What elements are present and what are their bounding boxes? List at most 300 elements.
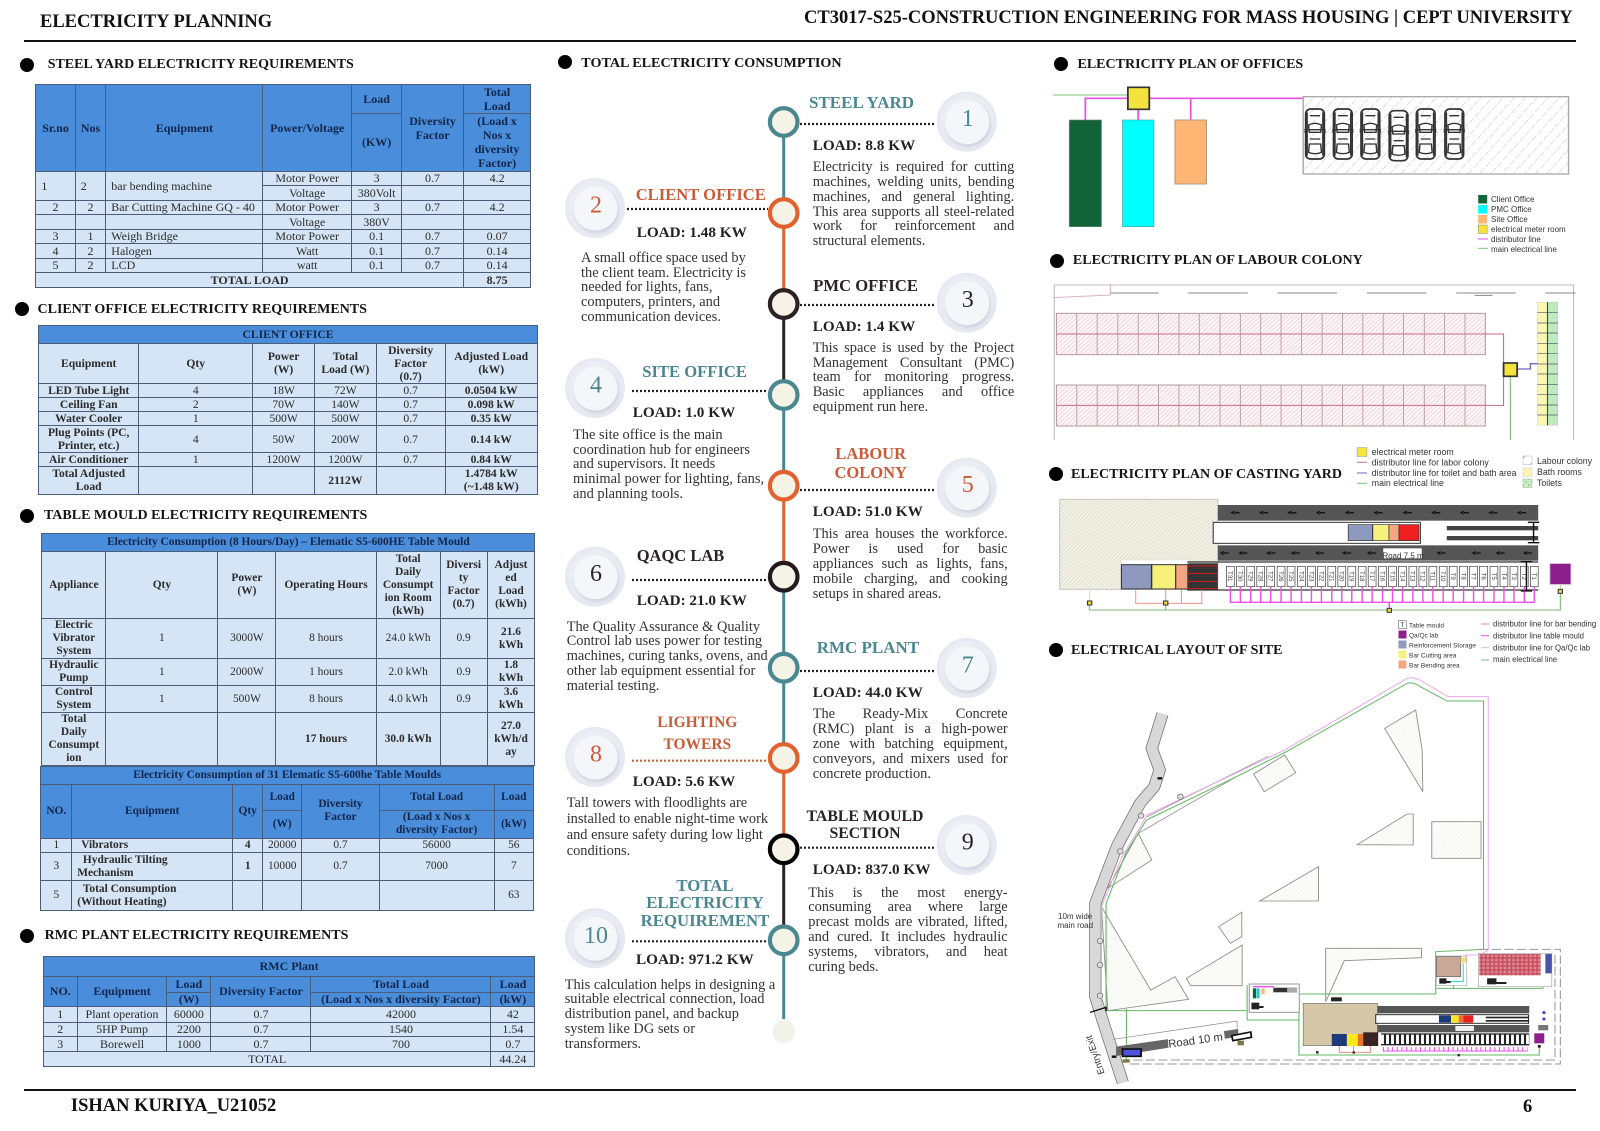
item 4 text: minimal power for lighting, fans, (573, 471, 764, 487)
item 8 text: conditions. (567, 843, 630, 859)
table: table mould 31 units: Total Consumption (83, 883, 176, 895)
item 10 text: transformers. (565, 1036, 641, 1052)
table: steel yard: Equipment (156, 121, 213, 135)
table: client office: 0.7 (403, 398, 418, 411)
table: steel yard: 1 (87, 229, 93, 243)
table: steel yard: 3 (374, 200, 380, 214)
table: rmc plant: 3 (57, 1037, 63, 1051)
dotted connectors (627, 124, 936, 941)
casting yard legend: Table mould (1409, 622, 1444, 630)
table: steel yard: Total (484, 85, 510, 99)
item 8 load: LOAD: 5.6 KW (633, 773, 735, 790)
plan of labour colony (1052, 283, 1593, 488)
table: client office: 1200W (267, 453, 301, 466)
table: table mould single: Pump (59, 672, 88, 684)
item 1 text: This area supports all steel-related (813, 204, 1014, 220)
table: table mould 31 units: 7 (511, 860, 517, 872)
table: table mould single: 0.9 (456, 666, 471, 678)
item 6 text: other lab equipment essential for (567, 663, 755, 679)
table: steel yard: 0.1 (369, 258, 384, 272)
table: steel yard: Motor Power (275, 200, 339, 214)
table: steel yard (35, 84, 531, 288)
item 2 title: CLIENT OFFICE (636, 185, 766, 204)
table: rmc plant: 1 (57, 1007, 63, 1021)
heading: total consumption: TOTAL ELECTRICITY CONSUMPTION (581, 54, 842, 70)
table: table mould single: ay (505, 746, 517, 758)
table: table mould single: 24.0 kWh (386, 632, 431, 644)
casting yard drawing: T26 (1277, 571, 1284, 582)
table: table mould single: System (56, 645, 91, 657)
table: rmc plant: TOTAL (248, 1052, 286, 1066)
table: steel yard: Halogen (111, 244, 152, 258)
table: client office: 18W (272, 384, 295, 397)
item 10 title: ELECTRICITY (646, 893, 764, 912)
number discs: 2 (590, 192, 602, 218)
item 8 title (657, 714, 737, 753)
table: table mould single: 21.6 (501, 626, 521, 638)
boundary (1127, 949, 1560, 1064)
table: table mould 31 units: 5 (53, 889, 59, 901)
heading: plan of labour colony: ELECTRICITY PLAN OF LABOUR COLONY (1073, 253, 1363, 268)
office legend: Site Office (1491, 215, 1528, 224)
table: table mould single: Adjust (495, 559, 527, 571)
table: table mould 31 units: 4 (245, 839, 251, 851)
table: steel yard: Motor Power (275, 229, 339, 243)
table: table mould 31 units: (Without Heating) (77, 896, 167, 908)
table: steel yard: 0.07 (487, 229, 508, 243)
item 5 text: This area houses the workforce. (813, 526, 1008, 542)
item 7 text: zone with batching equipment, (813, 736, 1008, 752)
page number: 6 (1523, 1096, 1532, 1116)
table: table mould single: (kWh) (392, 605, 424, 617)
table: steel yard: Weigh Bridge (111, 229, 178, 243)
item 8 title: TOWERS (663, 736, 731, 753)
table: client office: Load (W) (321, 363, 369, 376)
number discs: 6 (590, 561, 602, 587)
table: client office: Total Adjusted (52, 467, 125, 480)
table: client office: (~1.48 kW) (464, 480, 519, 493)
table: rmc plant: 44.24 (499, 1052, 526, 1066)
casting yard drawing: T14 (1398, 571, 1406, 582)
table: table mould single: Load (498, 585, 524, 597)
table: table mould single: Factor (447, 585, 480, 597)
table: client office: Power (268, 350, 299, 363)
casting yard drawing: T8 (1459, 573, 1467, 580)
table: table mould 31 units: Equipment (125, 805, 179, 817)
item 7 text: conveyors, and mixers used for (813, 751, 1008, 767)
item 7 text: (RMC) plant is a high-power (813, 721, 1008, 737)
table: steel yard: 0.1 (369, 244, 384, 258)
table: rmc plant: (Load x Nos x diversity Factor) (321, 992, 481, 1006)
table: client office: 0.7 (403, 412, 418, 425)
table: table mould single: Electricity Consumption (8 Hours/Day) – Elematic S5-600HE Table Mould (107, 536, 470, 548)
casting yard drawing: T4 (1500, 573, 1507, 580)
table: table mould 31 units: 1 (53, 839, 59, 851)
item 6 text: material testing. (567, 678, 659, 694)
casting yard drawing: T16 (1378, 571, 1386, 582)
casting yard drawing: T30 (1236, 571, 1243, 582)
item 4 title: SITE OFFICE (642, 362, 747, 381)
table: steel yard: Motor Power (275, 171, 339, 185)
casting yard drawing: T21 (1328, 571, 1335, 582)
item 6 title: QAQC LAB (637, 546, 724, 565)
office legend: distributor line (1491, 235, 1541, 244)
table: steel yard: 4.2 (490, 171, 505, 185)
table: steel yard: 2 (87, 244, 93, 258)
table: table mould single: Operating Hours (284, 579, 368, 591)
item 6 text: The Quality Assurance & Quality (567, 619, 760, 635)
item 7 title: RMC PLANT (817, 638, 919, 657)
table: rmc plant: 2200 (177, 1022, 201, 1036)
table: client office: 2112W (328, 474, 362, 487)
item 2 text (581, 250, 746, 325)
item 7 text: The Ready-Mix Concrete (813, 706, 1008, 722)
table: table mould 31 units: 20000 (268, 839, 296, 851)
table: rmc plant: Plant operation (86, 1007, 159, 1021)
table: rmc plant: RMC Plant (260, 959, 319, 973)
spine (782, 122, 785, 1019)
table: steel yard: watt (297, 258, 318, 272)
table: client office: Adjusted Load (454, 350, 528, 363)
casting yard drawing: T6 (1479, 573, 1487, 580)
table: steel yard: Watt (296, 244, 318, 258)
table: client office: 0.7 (403, 433, 418, 446)
item 5 title: COLONY (834, 463, 907, 482)
site labels: Entry/Exit (1084, 1033, 1107, 1076)
item 10 text: system like DG sets or (565, 1021, 695, 1037)
heading: electrical layout of site: ELECTRICAL LAYOUT OF SITE (1071, 643, 1282, 658)
table: steel yard: 2 (53, 200, 59, 214)
table: table mould 31 units: (kW) (501, 818, 526, 830)
casting yard drawing: T23 (1307, 571, 1314, 582)
item 2 text: the client team. Electricity is (581, 265, 746, 281)
table: steel yard: diversity (475, 142, 519, 156)
main lines (1106, 683, 1543, 1060)
table: table mould single: kWh (499, 699, 523, 711)
site layout (1058, 677, 1561, 1084)
item 4 text: and planning tools. (573, 486, 683, 502)
road label: Road 7.5 m (1382, 552, 1424, 560)
number discs: 8 (590, 742, 602, 768)
table: table mould 31 units: 3 (53, 860, 59, 872)
item 5 title (834, 444, 907, 482)
casting yard legend: Reinforcement Storage (1409, 642, 1476, 650)
table: table mould single: 1 (159, 666, 165, 678)
table: steel yard: Nos (81, 121, 100, 135)
item 9 title: SECTION (829, 825, 901, 842)
item 1 text (812, 159, 1014, 249)
table: rmc plant: 42000 (386, 1007, 416, 1021)
item 7 text (813, 706, 1008, 782)
table: rmc plant: 1.54 (502, 1022, 523, 1036)
table: table mould single: 3000W (230, 632, 264, 644)
item 10 text: This calculation helps in designing a (565, 977, 775, 993)
table: table mould single: ion Room (385, 592, 432, 604)
title: ELECTRICITY PLANNING (40, 12, 272, 32)
table: client office: 0.84 kW (471, 453, 512, 466)
table: table mould single: 1 (159, 632, 165, 644)
table: table mould 31 units: Factor (324, 811, 357, 823)
table: steel yard: 1 (41, 179, 47, 193)
item 6 load: LOAD: 21.0 KW (637, 592, 747, 609)
table: steel yard: 0.7 (425, 200, 440, 214)
colony legend (1357, 447, 1593, 488)
table: table mould 31 units: Mechanism (77, 867, 134, 879)
number discs: 5 (962, 472, 974, 498)
table: steel yard: Load (363, 92, 390, 106)
item 6 text (567, 619, 768, 694)
landscape plots (1101, 710, 1481, 1011)
site labels: 10m wide (1058, 912, 1093, 921)
table: table mould single: kWh (499, 672, 523, 684)
number discs: 7 (962, 652, 974, 678)
item 8 text: installed to enable night-time work (567, 811, 768, 827)
item 9 text: curing beds. (808, 959, 879, 975)
heading: client office: CLIENT OFFICE ELECTRICITY REQUIREMENTS (38, 302, 367, 316)
table: client office: 72W (334, 384, 357, 397)
table: table mould single: (W) (237, 585, 256, 597)
casting yard legend: Bar Cutting area (1409, 652, 1457, 660)
table: client office: 0.098 kW (468, 398, 515, 411)
table: client office: 1.4784 kW (465, 467, 518, 480)
item 2 text: computers, printers, and (581, 294, 720, 310)
table: table mould 31 units: (Load x Nos x (403, 811, 470, 823)
item 5 text: setups in shared areas. (813, 586, 941, 602)
table: table mould 31 units: Vibrators (81, 839, 128, 851)
item 3 text: Management Consultant (PMC) (813, 355, 1014, 371)
casting yard drawing: T27 (1267, 571, 1274, 582)
colony legend: distributor line for toilet and bath area (1372, 468, 1517, 478)
site labels: Road 10 m (1168, 1031, 1224, 1051)
item 8 text: and ensure safety during low light (567, 827, 763, 843)
item 10 text: suitable electrical connection, load (565, 991, 764, 1007)
item 9 text: and cured. It includes hydraulic (808, 929, 1008, 945)
qa lab (1534, 1011, 1548, 1048)
table: client office: 500W (331, 412, 360, 425)
table: table mould 31 units: 0.7 (333, 860, 348, 872)
table: rmc plant: 2 (57, 1022, 63, 1036)
table: table mould single (41, 533, 535, 766)
table: table mould single: Power (231, 572, 262, 584)
table: table mould single: Diversi (446, 559, 481, 571)
item 9 load: LOAD: 837.0 KW (813, 861, 930, 878)
colony legend: distributor line for labor colony (1372, 458, 1489, 468)
table: table mould single: (kWh) (495, 598, 527, 610)
table: rmc plant: Equipment (93, 984, 151, 998)
table: table mould 31 units: (W) (273, 818, 292, 830)
table: client office: 50W (272, 433, 295, 446)
casting yard legend: T (1400, 622, 1404, 629)
casting yard drawing: T24 (1297, 571, 1304, 582)
table: client office: (W) (274, 363, 293, 376)
item 5 text (813, 526, 1008, 602)
road 10 m (1116, 1029, 1238, 1056)
item 3 text: Basic appliances and office (813, 384, 1014, 400)
office legend: Client Office (1491, 195, 1535, 204)
table: table mould single: Consumpt (383, 579, 433, 591)
timeline graphic (565, 92, 997, 1044)
colony legend: Labour colony (1537, 456, 1593, 466)
table: client office: 1 (193, 412, 199, 425)
table: table mould 31 units (40, 766, 534, 911)
table: table mould single: 2.0 kWh (389, 666, 428, 678)
number discs: 3 (962, 287, 974, 313)
item 5 text: mobile charging, and cooking (813, 571, 1008, 587)
table: rmc plant: Borewell (100, 1037, 144, 1051)
casting yard drawing: T3 (1510, 573, 1517, 580)
table: table mould single: 500W (233, 693, 261, 705)
table: table mould single: Qty (153, 579, 171, 591)
table: rmc plant: NO. (50, 984, 71, 998)
table: client office: 0.0504 kW (465, 384, 518, 397)
table: rmc plant: 0.7 (253, 1037, 268, 1051)
casting yard legend: main electrical line (1493, 655, 1557, 664)
casting yard drawing: T20 (1338, 571, 1345, 582)
table: client office: (0.7) (400, 370, 422, 383)
table: client office: 1200W (328, 453, 362, 466)
table: client office: Qty (186, 357, 205, 370)
casting yard legend: distributor line for bar bending (1493, 620, 1596, 628)
item 4 text (573, 427, 764, 502)
end dot (772, 1020, 795, 1043)
table: table mould single: 1.8 (504, 659, 518, 671)
distributor lines (1101, 678, 1488, 1007)
table: client office: 1 (193, 453, 199, 466)
casting yard drawing: T25 (1287, 571, 1294, 582)
heading: steel yard: STEEL YARD ELECTRICITY REQUIREMENTS (48, 57, 354, 72)
heading: plan of casting yard: ELECTRICITY PLAN OF CASTING YARD (1071, 466, 1342, 482)
table: table mould single: Daily (61, 726, 87, 738)
table: rmc plant: 1000 (177, 1037, 201, 1051)
client offices block (1436, 956, 1467, 985)
table: client office: 4 (193, 384, 199, 397)
table: steel yard: 2 (87, 258, 93, 272)
item 9 text: consuming area where large (808, 899, 1008, 915)
table: steel yard: (KW) (362, 135, 391, 149)
item 5 text: Power is used for basic (813, 541, 1008, 557)
table: steel yard: Sr.no (42, 121, 69, 135)
table: table mould single: (0.7) (453, 598, 474, 610)
table: steel yard: 2 (87, 200, 93, 214)
table: rmc plant: (kW) (500, 992, 526, 1006)
table: client office: Factor (394, 357, 427, 370)
table: steel yard: 0.1 (369, 229, 384, 243)
table: steel yard: bar bending machine (111, 179, 212, 193)
table: client office: Equipment (61, 357, 116, 370)
table: table mould single: System (56, 699, 91, 711)
table: client office: 0.35 kW (471, 412, 512, 425)
item 8 text (567, 795, 768, 859)
table: rmc plant: 700 (392, 1037, 410, 1051)
table: steel yard: Diversity (409, 114, 456, 128)
table: table mould single: Electric (55, 619, 93, 631)
office drawing (1053, 87, 1569, 227)
table: client office: Load (76, 480, 102, 493)
table: steel yard: LCD (111, 258, 135, 272)
item 10 text: distribution panel, and backup (565, 1006, 739, 1022)
table: table mould single: 27.0 (501, 720, 521, 732)
item 5 load: LOAD: 51.0 KW (813, 503, 923, 520)
colony legend: electrical meter room (1372, 447, 1454, 457)
item 1 text: work for reinforcement and (813, 218, 1014, 234)
table: table mould single: 0.9 (456, 632, 471, 644)
table: table mould single: Appliance (49, 579, 99, 591)
table: client office: 500W (269, 412, 298, 425)
item 4 text: and supervisors. It needs (573, 456, 715, 472)
number discs (565, 92, 997, 968)
nodes (770, 108, 798, 954)
item 5 text: appliances such as lights, fans, (813, 556, 1008, 572)
casting yard legend: Bar Bending area (1409, 662, 1460, 670)
table: rmc plant: 60000 (174, 1007, 204, 1021)
table: steel yard: Load (484, 99, 510, 113)
table: rmc plant: 0.7 (253, 1022, 268, 1036)
table: client office: Air Conditioner (49, 453, 128, 466)
casting yard drawing: T1 (1530, 573, 1537, 580)
item 2 text: communication devices. (581, 309, 721, 325)
item 9 title: TABLE MOULD (807, 808, 923, 825)
heading: rmc plant: RMC PLANT ELECTRICITY REQUIREMENTS (45, 928, 348, 943)
item 1 text: Electricity is required for cutting (813, 159, 1014, 175)
item 8 text: Tall towers with floodlights are (567, 795, 747, 811)
colony legend: Bath rooms (1537, 467, 1582, 477)
table: steel yard: 3 (53, 229, 59, 243)
casting yard legend: Qa/Qc lab (1409, 632, 1439, 640)
table: rmc plant: 0.7 (505, 1037, 520, 1051)
item 4 load: LOAD: 1.0 KW (633, 404, 735, 421)
table: table mould 31 units: 56000 (422, 839, 451, 851)
casting yard legend (1398, 620, 1596, 670)
table: table mould single: 2000W (230, 666, 264, 678)
table: table mould single: ty (459, 572, 468, 584)
table: table mould single: 8 hours (309, 632, 343, 644)
table: table mould single: 0.9 (456, 693, 471, 705)
item 1 text: machines, welding units, bending (813, 174, 1014, 190)
table: table mould 31 units: 1 (245, 860, 251, 872)
table: client office: 0.14 kW (471, 433, 512, 446)
table: table mould single: 17 hours (305, 733, 347, 745)
item 9 title (806, 808, 923, 842)
casting yard drawing: T18 (1358, 571, 1365, 582)
table: steel yard: Voltage (289, 215, 325, 229)
table: client office: 0.7 (403, 453, 418, 466)
table: client office: 140W (331, 398, 360, 411)
table: client office: 200W (331, 433, 360, 446)
table: client office: LED Tube Light (48, 384, 129, 397)
number discs: 1 (962, 106, 974, 132)
item 10 text (564, 977, 776, 1052)
table: table mould 31 units: 0.7 (333, 839, 348, 851)
table: steel yard: Bar Cutting Machine GQ - 40 (111, 200, 255, 214)
colony legend: main electrical line (1372, 478, 1444, 488)
casting yard drawing: T12 (1419, 571, 1426, 582)
number discs: 10 (584, 923, 608, 949)
table: client office: Total (333, 350, 358, 363)
table: table mould single: Hydraulic (49, 659, 99, 671)
table: steel yard: 0.14 (487, 244, 508, 258)
casting yard drawing: T9 (1449, 573, 1456, 580)
table: steel yard: 5 (53, 258, 59, 272)
table: table mould single: Total (61, 713, 86, 725)
office legend (1478, 195, 1566, 254)
table: table mould single: ed (505, 572, 517, 584)
casting yard drawing (1060, 499, 1571, 612)
table: table mould single: Daily (395, 566, 421, 578)
casting yard drawing: T7 (1469, 573, 1477, 580)
heading: plan of offices: ELECTRICITY PLAN OF OFFICES (1078, 56, 1303, 72)
table: client office: 70W (272, 398, 295, 411)
table: steel yard: Voltage (289, 186, 325, 200)
